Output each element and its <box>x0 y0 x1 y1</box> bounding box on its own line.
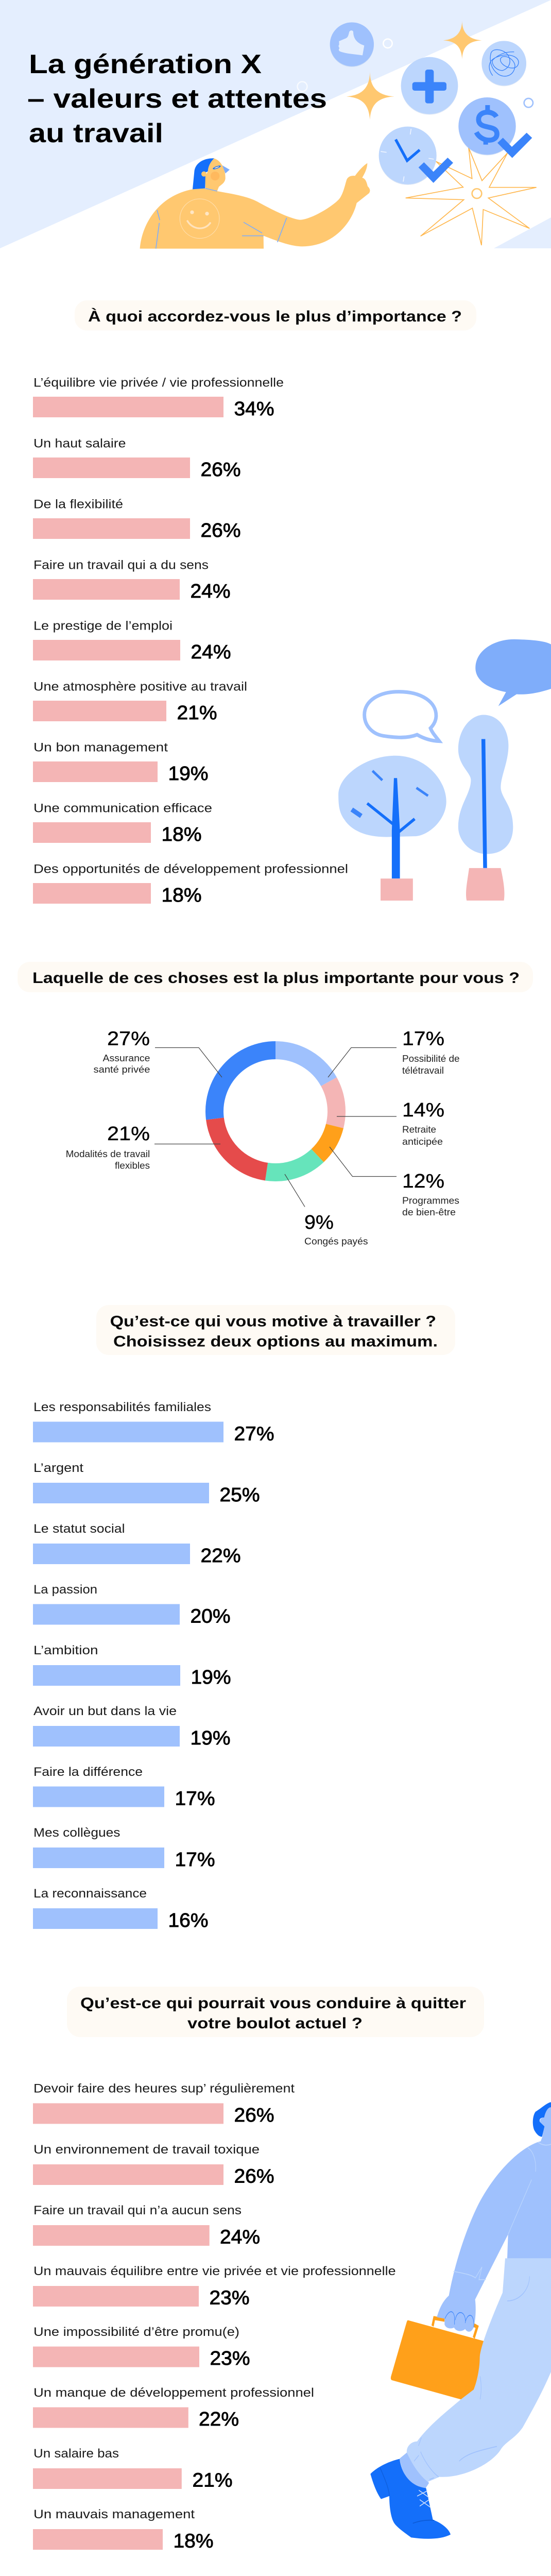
row reconnaissance: 16% <box>168 1910 208 1931</box>
header panel <box>0 0 551 249</box>
icon: thumbs up <box>330 22 374 67</box>
row ambition: L’ambition <box>33 1643 98 1657</box>
row prestige: Le prestige de l’emploi <box>33 619 173 633</box>
row développement <box>33 2386 314 2430</box>
donut label 12%: Programmes <box>402 1195 459 1206</box>
row développement: 18% <box>162 885 202 906</box>
row promotion: Une impossibilité d’être promu(e) <box>33 2325 239 2339</box>
row management: Un mauvais management <box>33 2507 195 2521</box>
donut label 9%: 9% <box>304 1212 334 1233</box>
donut label 21%: Modalités de travail <box>66 1149 150 1159</box>
donut chart <box>215 1050 336 1173</box>
heading: importance <box>75 300 476 331</box>
row familiales: 27% <box>234 1423 274 1445</box>
illustration: plants with speech bubbles <box>338 639 551 901</box>
heading: motivation: Choisissez deux options au maximum. <box>113 1333 438 1350</box>
row heures sup <box>33 2082 295 2126</box>
donut label 14% <box>402 1099 444 1147</box>
row but: Avoir un but dans la vie <box>33 1704 177 1718</box>
trousers <box>407 2258 551 2483</box>
row flexibilité: De la flexibilité <box>33 498 123 511</box>
illustration: icons and sparkles <box>330 20 537 245</box>
donut label 27% <box>94 1028 150 1075</box>
row management: Un bon management <box>33 741 168 754</box>
row développement: Des opportunités de développement professionnel <box>33 862 348 876</box>
row équilibre: 23% <box>209 2287 249 2309</box>
row haut salaire <box>33 437 241 481</box>
burst star <box>406 148 537 245</box>
hair and face <box>533 2102 551 2144</box>
icon: scribble <box>481 41 526 86</box>
icon: big sparkle <box>347 71 394 120</box>
row promotion <box>33 2325 250 2369</box>
bar chart: quitting reasons <box>33 2082 396 2552</box>
heading: quitting <box>67 1987 484 2037</box>
row collègues: Mes collègues <box>33 1826 120 1840</box>
donut label 17%: Possibilité de <box>402 1054 460 1064</box>
row management: 18% <box>173 2531 213 2552</box>
row développement <box>33 862 348 906</box>
row promotion: 23% <box>210 2348 250 2369</box>
trouser cuff <box>400 2453 429 2488</box>
row prestige <box>33 619 231 663</box>
row différence: Faire la différence <box>33 1765 143 1779</box>
row haut salaire: Un haut salaire <box>33 437 126 450</box>
donut label 17%: télétravail <box>402 1065 444 1076</box>
donut label 27%: santé privée <box>94 1064 150 1075</box>
row salaire: 21% <box>193 2470 233 2492</box>
bar chart: importance <box>33 376 348 906</box>
tree <box>338 756 446 901</box>
row salaire: Un salaire bas <box>33 2447 119 2461</box>
briefcase <box>391 2318 484 2399</box>
row argent: L’argent <box>33 1461 83 1475</box>
row statut: Le statut social <box>33 1522 125 1536</box>
row argent <box>33 1461 260 1506</box>
donut label 17% <box>402 1028 460 1076</box>
donut label 21%: flexibles <box>115 1160 150 1171</box>
row communication <box>33 802 212 845</box>
heading: motivation: Qu’est-ce qui vous motive à travailler ? <box>110 1313 436 1330</box>
row familiales: Les responsabilités familiales <box>33 1400 211 1414</box>
icon: dollar <box>458 97 532 158</box>
row passion: La passion <box>33 1583 97 1597</box>
row différence: 17% <box>175 1788 215 1809</box>
row sens: 24% <box>191 581 231 602</box>
row communication: Une communication efficace <box>33 802 212 815</box>
icon: plus <box>401 57 458 115</box>
row passion <box>33 1583 231 1627</box>
row haut salaire: 26% <box>201 459 241 481</box>
row aucun sens <box>33 2204 260 2248</box>
donut label 12%: de bien-être <box>402 1207 456 1217</box>
row aucun sens: Faire un travail qui n’a aucun sens <box>33 2204 242 2217</box>
bar chart: motivation <box>33 1400 274 1931</box>
donut label 9%: Congés payés <box>304 1236 368 1247</box>
row heures sup: Devoir faire des heures sup’ régulièrement <box>33 2082 295 2096</box>
donut label 27%: Assurance <box>103 1053 150 1063</box>
row communication: 18% <box>162 824 202 845</box>
row sens <box>33 558 231 602</box>
tall plant <box>458 715 513 901</box>
speech bubble outline <box>365 692 439 741</box>
row prestige: 24% <box>191 641 231 663</box>
heading: importance: À quoi accordez-vous le plus d’importance ? <box>88 308 462 325</box>
row flexibilité: 26% <box>201 520 241 541</box>
heading: most important <box>18 962 533 992</box>
row 34%: L’équilibre vie privée / vie professionnelle <box>33 376 284 389</box>
illustration: walking man with briefcase <box>370 2102 551 2539</box>
title: – valeurs et attentes <box>27 84 327 114</box>
row passion: 20% <box>191 1605 231 1627</box>
row but <box>33 1704 231 1749</box>
row but: 19% <box>191 1727 231 1749</box>
donut label 12%: 12% <box>402 1171 444 1192</box>
row atmosphère: 21% <box>177 702 217 724</box>
row toxique <box>33 2143 274 2188</box>
heading: quitting: votre boulot actuel ? <box>187 2015 363 2032</box>
row aucun sens: 24% <box>220 2227 260 2248</box>
row statut: 22% <box>201 1545 241 1567</box>
donut label 27%: 27% <box>107 1028 150 1050</box>
icon: small sparkle <box>443 20 482 59</box>
row ambition: 19% <box>191 1667 231 1688</box>
row différence <box>33 1765 215 1809</box>
donut label 17%: 17% <box>402 1028 444 1050</box>
row reconnaissance: La reconnaissance <box>33 1887 147 1901</box>
row management <box>33 2507 213 2552</box>
shoe <box>370 2459 451 2539</box>
row toxique: 26% <box>234 2166 274 2188</box>
row salaire <box>33 2447 233 2492</box>
shirt and hand <box>437 2141 551 2332</box>
title: au travail <box>29 118 163 148</box>
illustration: person pointing <box>140 158 370 249</box>
row argent: 25% <box>219 1484 260 1506</box>
row collègues <box>33 1826 215 1871</box>
row management <box>33 741 208 785</box>
donut label 14%: Retraite <box>402 1124 436 1134</box>
donut label 14%: 14% <box>402 1099 444 1121</box>
donut label 21% <box>66 1123 150 1171</box>
row management: 19% <box>168 763 208 785</box>
row 34%: 34% <box>234 398 274 420</box>
speech bubble filled <box>475 639 551 706</box>
heading: most important: Laquelle de ces choses est la plus importante pour vous ? <box>32 970 520 987</box>
row atmosphère: Une atmosphère positive au travail <box>33 680 247 693</box>
donut label 12% <box>402 1171 459 1217</box>
row équilibre <box>33 2264 396 2309</box>
row 34% <box>33 376 284 420</box>
row flexibilité <box>33 498 241 541</box>
row développement: Un manque de développement professionnel <box>33 2386 314 2400</box>
row toxique: Un environnement de travail toxique <box>33 2143 260 2157</box>
donut label 14%: anticipée <box>402 1137 443 1147</box>
heading: quitting: Qu’est-ce qui pourrait vous conduire à quitter <box>80 1995 466 2012</box>
title <box>27 49 327 148</box>
icon: clock <box>379 127 453 185</box>
row statut <box>33 1522 241 1567</box>
row heures sup: 26% <box>234 2105 274 2126</box>
heading: motivation <box>96 1305 455 1355</box>
donut label 9% <box>304 1212 368 1247</box>
row équilibre: Un mauvais équilibre entre vie privée et vie professionnelle <box>33 2264 396 2278</box>
donut leader lines <box>154 1048 397 1207</box>
row familiales <box>33 1400 274 1445</box>
title: La génération X <box>29 49 262 79</box>
row développement: 22% <box>199 2409 239 2430</box>
row sens: Faire un travail qui a du sens <box>33 558 209 572</box>
row atmosphère <box>33 680 247 724</box>
row ambition <box>33 1643 231 1688</box>
small ring near title <box>298 81 307 92</box>
row collègues: 17% <box>175 1849 215 1871</box>
donut label 21%: 21% <box>107 1123 150 1145</box>
row reconnaissance <box>33 1887 208 1931</box>
